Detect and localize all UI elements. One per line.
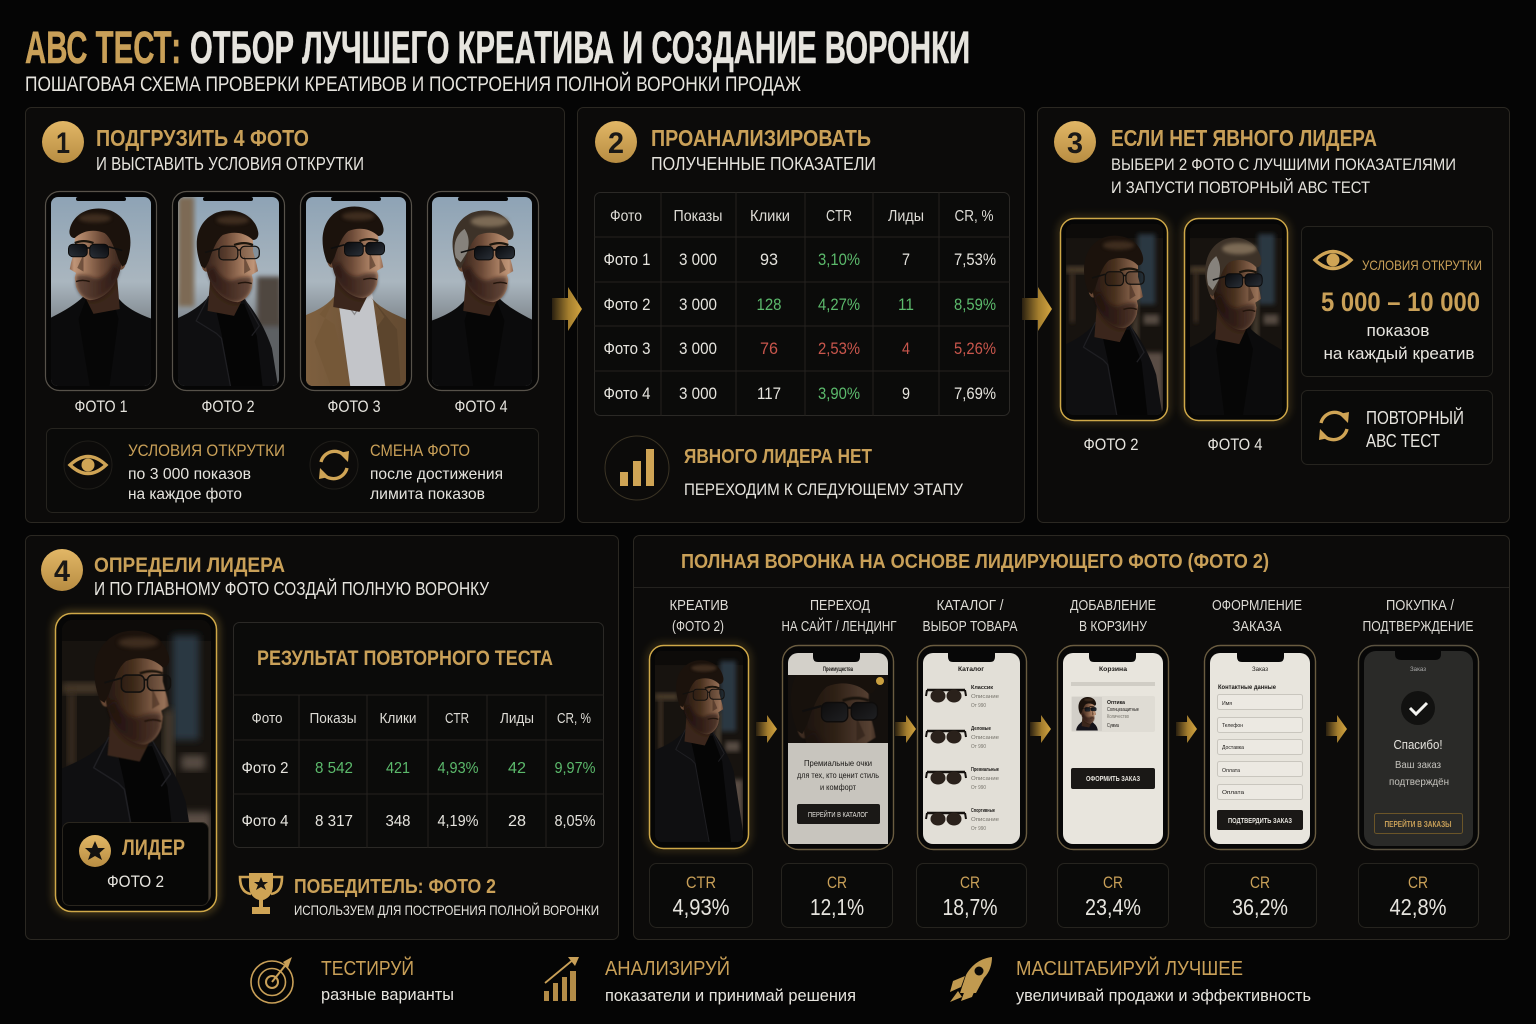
phone: catalog	[918, 646, 1026, 850]
phone: checkout	[1204, 646, 1316, 850]
results table: 117	[757, 384, 781, 403]
step number 2	[595, 121, 637, 163]
panel: full funnel	[626, 536, 1510, 940]
results table	[594, 192, 1010, 416]
phone: catalog: Деловые	[971, 726, 991, 732]
stage label: cart: В КОРЗИНУ	[1079, 618, 1147, 635]
phone: photo 2 gold	[1054, 212, 1174, 427]
metric: cart CR: 23,4%	[1085, 894, 1141, 920]
repeat test result table: 8 317	[315, 813, 353, 830]
phone: cart: Солнцезащитные	[1107, 707, 1139, 713]
stage label: cart	[1070, 597, 1156, 635]
repeat test result table: Клики	[380, 710, 416, 727]
repeat test result table: 348	[386, 813, 411, 830]
impressions card: 5 000 – 10 000	[1321, 287, 1480, 317]
repeat test result table	[233, 622, 604, 848]
step number 4: 4	[54, 555, 70, 588]
results table: Фото 4	[604, 384, 650, 403]
repeat test result table: CR, %	[557, 710, 591, 727]
panel: step 4 leader	[15, 536, 619, 940]
results table: 3,90%	[818, 384, 860, 403]
arrow: creative to landing	[756, 715, 777, 743]
metric: checkout CR: CR	[1250, 873, 1270, 892]
phone: checkout: Контактные данные	[1218, 684, 1276, 691]
phone: checkout: Оплата	[1222, 790, 1245, 796]
metric: checkout CR: 36,2%	[1232, 894, 1288, 920]
phone: catalog: Описание	[971, 694, 999, 700]
results table: 3 000	[679, 339, 717, 358]
phone: cart: Количество	[1107, 714, 1129, 720]
panel: step 1 upload photos	[14, 108, 570, 522]
footer scale text: МАСШТАБИРУЙ ЛУЧШЕЕ	[1016, 956, 1243, 980]
phone: purchase: Заказ	[1410, 667, 1426, 673]
stage label: checkout: ЗАКАЗА	[1232, 618, 1282, 635]
phone: catalog: Каталог	[958, 667, 985, 673]
results table: 7,53%	[954, 250, 996, 269]
label photo 2 gold: ФОТО 2	[1084, 435, 1138, 454]
metric: catalog CR	[916, 864, 1026, 928]
step number 1	[42, 121, 84, 163]
step number 4	[41, 549, 83, 591]
phone: catalog: Описание	[971, 776, 999, 782]
phone: checkout: Телефон	[1222, 723, 1243, 729]
footer test text: ТЕСТИРУЙ	[321, 956, 414, 980]
phone: cart: ОФОРМИТЬ ЗАКАЗ	[1086, 776, 1140, 783]
phone: cart	[1058, 646, 1168, 850]
phone: purchase: подтверждён	[1389, 777, 1449, 788]
stage label: creative: (ФОТО 2)	[672, 618, 724, 635]
winner text: ИСПОЛЬЗУЕМ ДЛЯ ПОСТРОЕНИЯ ПОЛНОЙ ВОРОНКИ	[294, 901, 599, 918]
icon: trophy	[240, 873, 282, 914]
phone: checkout: Заказ	[1252, 667, 1268, 673]
phone: creative	[626, 645, 749, 860]
repeat test result table: 9,97%	[554, 760, 596, 777]
results table: 4	[902, 339, 910, 358]
label photo 2: ФОТО 2	[202, 397, 254, 416]
repeat test result table: 4,93%	[438, 760, 478, 777]
no leader callout: ЯВНОГО ЛИДЕРА НЕТ	[684, 446, 872, 468]
results table: 3 000	[679, 295, 717, 314]
results table: Фото 3	[604, 339, 650, 358]
leader badge: ЛИДЕР	[122, 835, 185, 860]
results table: 4,27%	[818, 295, 860, 314]
metric: landing CR	[782, 864, 892, 928]
table title: РЕЗУЛЬТАТ ПОВТОРНОГО ТЕСТА	[257, 647, 553, 670]
label photo 4 gold: ФОТО 4	[1208, 435, 1262, 454]
photo change text	[370, 441, 503, 503]
leader badge: ФОТО 2	[107, 872, 164, 891]
results table: Фото 2	[604, 295, 650, 314]
winner text	[294, 876, 599, 918]
stage label: landing	[782, 597, 896, 635]
phone: catalog: От 990	[971, 703, 986, 709]
footer scale text: увеличивай продажи и эффективность	[1016, 986, 1311, 1005]
repeat test card: ПОВТОРНЫЙ	[1366, 407, 1464, 428]
stage label: landing: ПЕРЕХОД	[810, 597, 870, 614]
metric: cart CR: CR	[1103, 873, 1123, 892]
stage label: cart: ДОБАВЛЕНИЕ	[1070, 597, 1156, 614]
phone: catalog: Описание	[971, 735, 999, 741]
phone: photo 1	[44, 190, 158, 392]
heading step 2	[651, 125, 876, 174]
stage label: creative: КРЕАТИВ	[670, 597, 728, 614]
stage label: checkout: ОФОРМЛЕНИЕ	[1212, 597, 1302, 614]
step number 1: 1	[56, 127, 70, 160]
footer analyse text	[605, 956, 856, 1005]
stage label: creative	[670, 597, 728, 635]
icon: bar chart	[605, 436, 669, 500]
impressions card	[1302, 226, 1492, 376]
footer test text	[321, 956, 454, 1004]
repeat test result table: Фото 4	[242, 813, 289, 830]
repeat test result table: CTR	[445, 710, 469, 727]
footer analyse text: АНАЛИЗИРУЙ	[605, 956, 730, 980]
metric: CTR	[650, 864, 752, 928]
footer: analyse	[544, 956, 856, 1005]
metric: checkout CR	[1204, 864, 1316, 928]
phone: catalog: Описание	[971, 817, 999, 823]
results table: 5,26%	[954, 339, 996, 358]
phone: checkout: Оплата	[1222, 768, 1241, 774]
stage label: purchase: ПОКУПКА /	[1386, 597, 1455, 614]
stage label: purchase	[1362, 597, 1474, 635]
phone: landing: Преимущества	[823, 667, 853, 673]
icon: rocket	[950, 957, 992, 1002]
footer: scale	[950, 956, 1311, 1005]
icon: eye	[64, 441, 112, 489]
photo change text: СМЕНА ФОТО	[370, 441, 470, 460]
panel: step 3 repeat test	[1022, 108, 1510, 522]
phone: catalog: Спортивные	[971, 808, 995, 814]
phone: catalog: От 990	[971, 826, 986, 832]
heading step 2: ПРОАНАЛИЗИРОВАТЬ	[651, 125, 871, 151]
conditions text: УСЛОВИЯ ОТКРУТКИ	[128, 441, 285, 460]
label photo 4: ФОТО 4	[454, 397, 508, 416]
funnel heading: ПОЛНАЯ ВОРОНКА НА ОСНОВЕ ЛИДИРУЮЩЕГО ФОТО (ФОТО 2)	[681, 551, 1269, 573]
results table: 7	[902, 250, 910, 269]
phone: landing: Премиальные очки	[804, 758, 872, 768]
stage label: landing: НА САЙТ / ЛЕНДИНГ	[782, 617, 896, 635]
metric: landing CR: 12,1%	[810, 894, 864, 920]
footer: test	[251, 956, 454, 1004]
results table: 93	[760, 250, 778, 269]
heading step 3: ЕСЛИ НЕТ ЯВНОГО ЛИДЕРА	[1111, 125, 1377, 151]
metric: landing CR: CR	[827, 873, 847, 892]
arrow: step 2 to 3	[1022, 287, 1052, 331]
metric: catalog CR: 18,7%	[942, 894, 998, 920]
results table: Фото 1	[604, 250, 650, 269]
results table: 9	[902, 384, 910, 403]
heading step 4: ОПРЕДЕЛИ ЛИДЕРА	[94, 554, 285, 577]
phone: purchase: Спасибо!	[1394, 737, 1442, 752]
results table: Клики	[750, 208, 790, 225]
arrow: landing to catalog	[895, 715, 916, 743]
phone: landing: ПЕРЕЙТИ В КАТАЛОГ	[808, 810, 868, 819]
phone: purchase: ПЕРЕЙТИ В ЗАКАЗЫ	[1384, 820, 1452, 829]
repeat test result table: 4,19%	[438, 813, 478, 830]
results table: CTR	[826, 208, 852, 225]
phone: catalog: От 990	[971, 744, 986, 750]
photo change text: лимита показов	[370, 486, 485, 503]
results table: Лиды	[888, 208, 924, 225]
stage label: purchase: ПОДТВЕРЖДЕНИЕ	[1362, 618, 1474, 635]
footer scale text	[1016, 956, 1311, 1005]
heading step 1: И ВЫСТАВИТЬ УСЛОВИЯ ОТКРУТКИ	[96, 154, 364, 174]
arrow: step 1 to 2	[552, 287, 582, 331]
phone: landing	[782, 646, 894, 850]
stage label: catalog	[922, 597, 1018, 635]
step number 3: 3	[1067, 127, 1083, 160]
panel: step 2 analyse	[578, 108, 1024, 522]
icon: growth chart	[544, 957, 579, 1001]
results table: 3 000	[679, 384, 717, 403]
label photo 1: ФОТО 1	[74, 397, 128, 416]
no leader callout	[684, 446, 963, 499]
phone: catalog: От 990	[971, 785, 986, 791]
conditions box	[46, 428, 538, 512]
phone: purchase: Ваш заказ	[1395, 760, 1441, 771]
conditions text: по 3 000 показов	[128, 466, 251, 483]
no leader callout: ПЕРЕХОДИМ К СЛЕДУЮЩЕМУ ЭТАПУ	[684, 480, 963, 499]
phone: checkout: ПОДТВЕРДИТЬ ЗАКАЗ	[1228, 818, 1292, 825]
metric: purchase CR	[1358, 864, 1478, 928]
repeat test result table: Показы	[310, 710, 356, 727]
phone: cart: Корзина	[1099, 667, 1128, 673]
results table: 128	[756, 295, 782, 314]
repeat test result table: 42	[508, 760, 526, 777]
repeat test result table: 8 542	[315, 760, 353, 777]
results table: Показы	[674, 208, 722, 225]
phone: photo 2	[172, 190, 286, 392]
metric: CTR: 4,93%	[672, 894, 730, 920]
phone: photo 4 gold	[1178, 212, 1294, 427]
impressions card: на каждый креатив	[1324, 344, 1474, 363]
phone: catalog: Классик	[971, 685, 993, 691]
metric: catalog CR: CR	[960, 873, 980, 892]
results table: 8,59%	[954, 295, 996, 314]
results table: Фото	[610, 208, 642, 225]
phone: checkout: Доставка	[1222, 745, 1245, 751]
heading step 3: И ЗАПУСТИ ПОВТОРНЫЙ АВС ТЕСТ	[1111, 178, 1370, 197]
photo change text: после достижения	[370, 466, 503, 483]
conditions text: на каждое фото	[128, 486, 242, 503]
phone: cart: Сумма	[1107, 723, 1119, 729]
phone: landing: и комфорт	[820, 782, 856, 792]
results table: 2,53%	[818, 339, 860, 358]
repeat test result table: 28	[508, 813, 526, 830]
heading step 2: ПОЛУЧЕННЫЕ ПОКАЗАТЕЛИ	[651, 154, 876, 174]
heading step 1: ПОДГРУЗИТЬ 4 ФОТО	[96, 125, 309, 151]
step number 2: 2	[608, 127, 624, 160]
leader badge	[62, 822, 208, 906]
icon: cycle	[310, 441, 358, 489]
subtitle: ПОШАГОВАЯ СХЕМА ПРОВЕРКИ КРЕАТИВОВ И ПОСТРОЕНИЯ ПОЛНОЙ ВОРОНКИ ПРОДАЖ	[25, 72, 802, 96]
metric: cart CR	[1058, 864, 1168, 928]
heading step 3: ВЫБЕРИ 2 ФОТО С ЛУЧШИМИ ПОКАЗАТЕЛЯМИ	[1111, 155, 1456, 174]
results table: 7,69%	[954, 384, 996, 403]
footer analyse text: показатели и принимай решения	[605, 986, 856, 1005]
icon: target	[251, 957, 293, 1003]
results table: 11	[898, 295, 914, 314]
repeat test result table: Фото 2	[242, 760, 289, 777]
results table: 3 000	[679, 250, 717, 269]
repeat test result table: Фото	[252, 710, 282, 727]
phone: photo 4	[426, 190, 540, 392]
repeat test result table: 421	[386, 760, 410, 777]
impressions card: показов	[1366, 321, 1430, 340]
heading step 3	[1111, 125, 1456, 197]
conditions text	[128, 441, 285, 503]
title	[25, 22, 970, 73]
arrow: catalog to cart	[1030, 715, 1051, 743]
arrow: cart to checkout	[1176, 715, 1197, 743]
phone: catalog: Премиальные	[971, 767, 999, 773]
metric: CTR: CTR	[686, 873, 716, 892]
repeat test result table: Лиды	[500, 710, 534, 727]
impressions card: УСЛОВИЯ ОТКРУТКИ	[1362, 257, 1482, 273]
stage label: catalog: ВЫБОР ТОВАРА	[922, 618, 1018, 635]
arrow: checkout to purchase	[1326, 715, 1347, 743]
heading step 4	[94, 554, 489, 599]
phone: cart: Оптика	[1107, 700, 1125, 706]
metric: purchase CR: 42,8%	[1390, 894, 1446, 920]
phone: landing: для тех, кто ценит стиль	[797, 770, 879, 780]
phone: photo 3	[300, 190, 412, 392]
winner text: ПОБЕДИТЕЛЬ: ФОТО 2	[294, 876, 496, 898]
results table: 3,10%	[818, 250, 860, 269]
repeat test card: АВС ТЕСТ	[1366, 431, 1440, 451]
label photo 3: ФОТО 3	[328, 397, 380, 416]
step number 3	[1054, 121, 1096, 163]
results table: CR, %	[954, 208, 994, 225]
phone: purchase	[1358, 646, 1478, 850]
title: ОТБОР ЛУЧШЕГО КРЕАТИВА И СОЗДАНИЕ ВОРОНКИ	[190, 22, 970, 73]
heading step 1	[96, 125, 364, 174]
phone: leader photo	[48, 606, 224, 919]
stage label: checkout	[1212, 597, 1302, 635]
title: АВС ТЕСТ:	[25, 22, 181, 73]
repeat test result table: 8,05%	[554, 813, 596, 830]
heading step 4: И ПО ГЛАВНОМУ ФОТО СОЗДАЙ ПОЛНУЮ ВОРОНКУ	[94, 578, 489, 599]
phone: checkout: Имя	[1222, 701, 1232, 707]
metric: purchase CR: CR	[1408, 873, 1428, 892]
results table: 76	[760, 339, 778, 358]
stage label: catalog: КАТАЛОГ /	[936, 597, 1004, 614]
footer test text: разные варианты	[321, 985, 454, 1004]
repeat test card	[1302, 390, 1492, 464]
